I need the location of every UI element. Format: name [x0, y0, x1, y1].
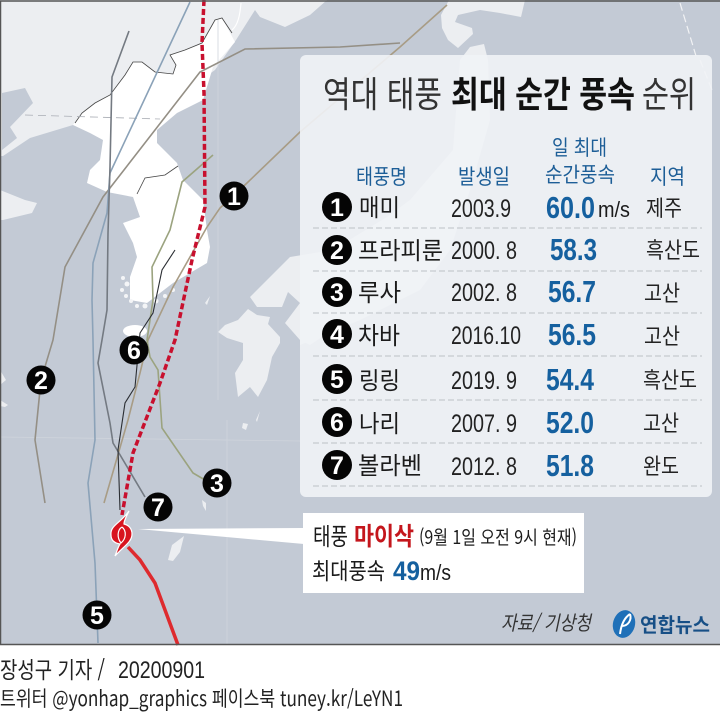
track 2 — [35, 43, 400, 503]
row dividers — [313, 228, 702, 486]
row 7: 51.8 — [546, 448, 594, 483]
map marker 7: 7 — [151, 494, 165, 522]
map marker 7 — [144, 492, 172, 522]
title: 역대 태풍 — [323, 66, 442, 118]
map marker 6 — [120, 336, 148, 365]
row 4: 고산 — [644, 319, 680, 351]
panel: ranking table — [300, 55, 712, 497]
row 6: 6 — [330, 409, 344, 437]
row 5: 링링 — [359, 361, 400, 396]
track 1 — [104, 5, 447, 503]
title: 최대 순간 풍속 — [451, 66, 635, 118]
table header: 순간풍속 — [545, 159, 615, 189]
row 2: 흑산도 — [646, 233, 700, 265]
callout: Maysak — [303, 513, 584, 593]
row 1 — [322, 188, 682, 225]
row 5: 5 — [330, 366, 344, 394]
row 3: 56.7 — [548, 274, 596, 309]
table header: 지역 — [650, 161, 685, 191]
row 3: 루사 — [358, 273, 401, 308]
map marker 5 — [82, 600, 112, 630]
callout: Maysak: 태풍 — [313, 517, 348, 552]
row 1: 매미 — [359, 188, 400, 223]
land: China and Russia — [0, 0, 327, 156]
callout: Maysak: (9월 1일 오전 9시 현재) — [419, 523, 577, 550]
row 4: 56.5 — [548, 317, 596, 352]
row 3: 3 — [330, 279, 344, 307]
row 6: 나리 — [359, 404, 400, 439]
row 1: 2003.9 — [451, 195, 511, 223]
source: 자료/ 기상청 — [501, 607, 593, 636]
table header: 일 최대 — [552, 132, 607, 162]
row 1: 60.0 — [546, 190, 595, 225]
row 1: m/s — [598, 197, 630, 222]
grid lines — [25, 115, 160, 119]
land: Hokkaido — [441, 0, 525, 48]
row 7: 2012. 8 — [451, 453, 517, 481]
row 5: 흑산도 — [643, 363, 697, 395]
map marker 1 — [220, 182, 248, 211]
row 1: 제주 — [646, 191, 682, 223]
row 2: 프라피룬 — [358, 231, 443, 266]
row 2: 2 — [330, 237, 344, 265]
map marker 2 — [26, 366, 56, 395]
track 5 — [88, 2, 190, 643]
land: Kyushu — [218, 309, 280, 397]
row 6 — [322, 404, 679, 440]
map marker 1: 1 — [227, 183, 241, 211]
icon: typhoon symbol — [111, 511, 132, 556]
land: Shikoku — [285, 303, 325, 345]
track 6 — [118, 250, 175, 510]
small islands — [0, 296, 260, 561]
title: 순위 — [642, 66, 696, 118]
land: Jeju — [123, 325, 147, 337]
southern islands — [120, 276, 175, 308]
row 3: 고산 — [644, 276, 680, 308]
typhoon tracks — [35, 2, 447, 643]
callout: Maysak: 최대풍속 — [312, 552, 385, 586]
row 5: 2019. 9 — [451, 367, 517, 395]
callout: Maysak: m/s — [420, 560, 451, 585]
row 7: 7 — [330, 452, 344, 480]
callout pointer — [138, 528, 304, 544]
callout: Maysak: 49 — [393, 556, 420, 586]
row 7: 볼라벤 — [358, 446, 422, 481]
map marker 3: 3 — [210, 470, 224, 498]
credit line: 장성구 기자 / — [0, 651, 105, 685]
row 2: 2000. 8 — [451, 237, 517, 265]
row 3: 2002. 8 — [451, 279, 517, 307]
track 3 — [147, 155, 213, 480]
land: Korean peninsula — [73, 18, 235, 303]
row 3 — [322, 273, 680, 309]
title — [323, 66, 696, 118]
border lines — [75, 18, 232, 194]
map marker 2: 2 — [34, 367, 48, 395]
land: Shandong — [0, 190, 37, 220]
row 4: 4 — [330, 321, 344, 349]
map marker 3 — [202, 468, 232, 498]
row 4 — [322, 316, 680, 352]
logo: Yonhap News: 연합뉴스 — [640, 609, 710, 638]
row 5 — [322, 361, 697, 397]
row 2 — [322, 231, 700, 267]
table header: 태풍명 — [356, 161, 407, 191]
logo: Yonhap News — [610, 608, 710, 640]
row 2: 58.3 — [550, 232, 597, 267]
row 5: 54.4 — [546, 362, 595, 397]
table header — [356, 132, 685, 191]
map marker 5: 5 — [90, 602, 104, 630]
credit line — [0, 651, 205, 685]
land: Honshu — [250, 44, 490, 345]
row 6: 2007. 9 — [451, 410, 517, 438]
row 6: 고산 — [643, 406, 679, 438]
row 7 — [322, 446, 679, 483]
Maysak past track: solid — [128, 547, 178, 645]
row 6: 52.0 — [546, 405, 594, 440]
callout: Maysak: 마이삭 — [354, 517, 414, 553]
row 7: 완도 — [643, 449, 679, 481]
track 7 — [98, 31, 145, 497]
credit line: 20200901 — [118, 657, 205, 684]
map marker 6: 6 — [127, 337, 141, 365]
row 1: 1 — [330, 194, 344, 222]
row 4: 차바 — [358, 316, 400, 351]
row 4: 2016.10 — [451, 322, 521, 350]
table header: 발생일 — [458, 161, 510, 191]
Bohai sea — [2, 88, 33, 150]
Maysak forecast track: dashed — [122, 0, 205, 515]
